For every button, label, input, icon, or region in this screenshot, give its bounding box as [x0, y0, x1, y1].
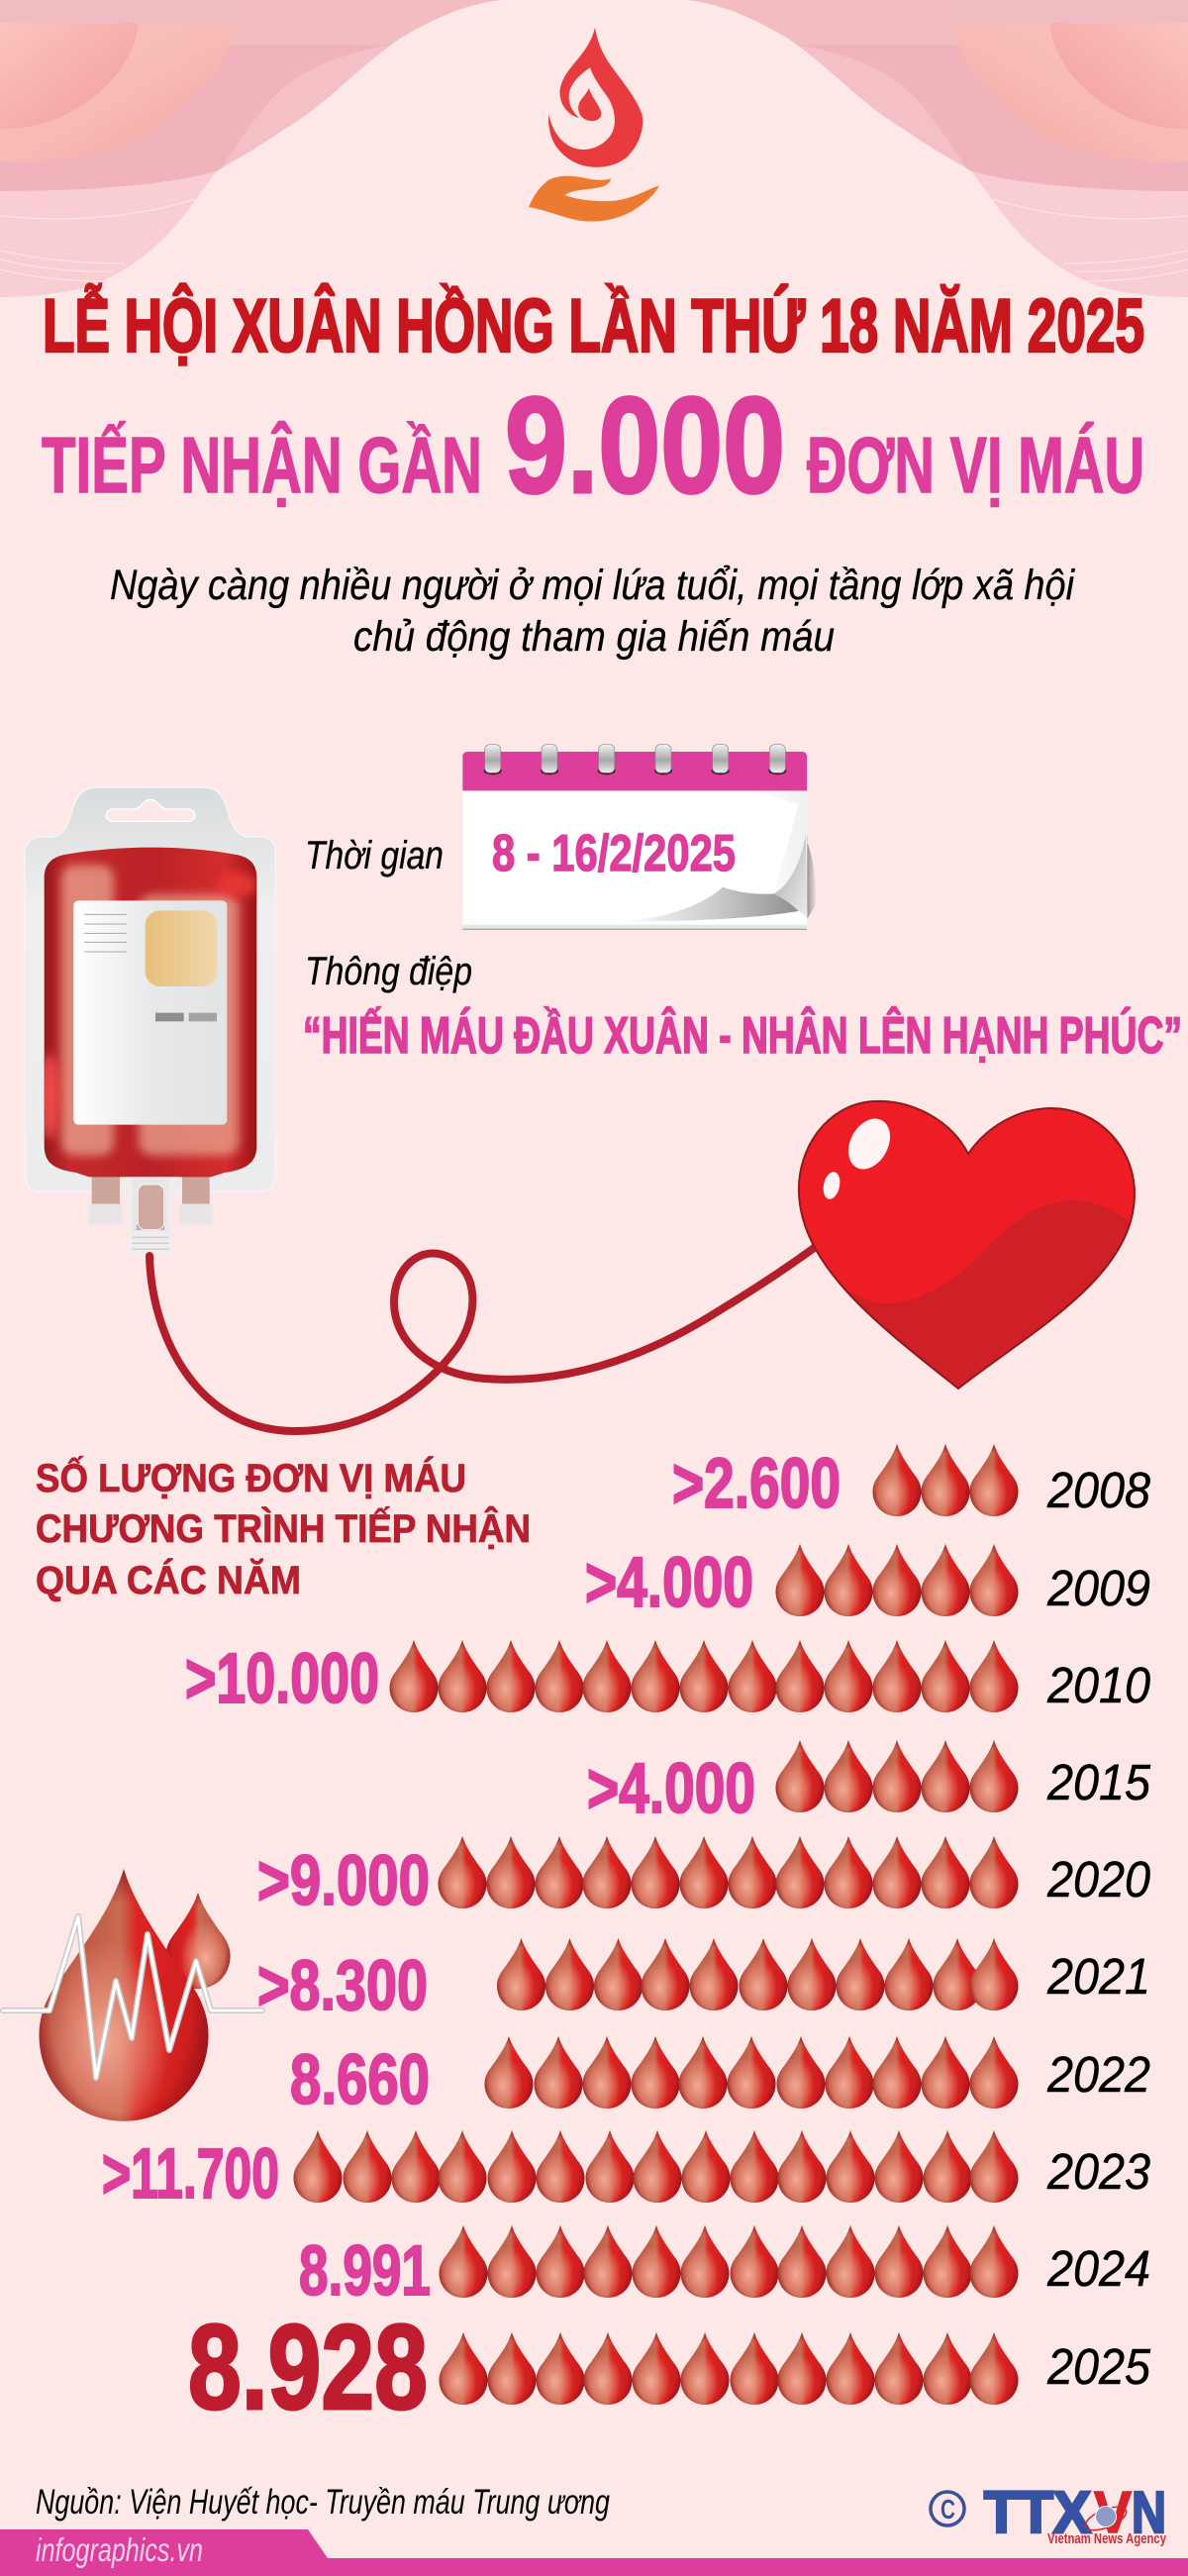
footer bar [0, 2529, 1188, 2576]
row: 2020: >9.000 [257, 1842, 430, 1920]
heading: near 9,000 units [42, 369, 1144, 522]
source note: Nguồn: Viện Huyết học- Truyền máu Trung ương [36, 2483, 610, 2522]
row: 2009: 2009 [1046, 1560, 1150, 1616]
icon: calendar [462, 745, 816, 930]
row: 2020 [257, 1836, 1150, 1920]
row: 2015: 2015 [1046, 1754, 1151, 1810]
icon: heart [792, 1101, 1148, 1406]
row: 2015: >4.000 [587, 1750, 755, 1828]
subtitle text: chủ động tham gia hiến máu [353, 613, 835, 661]
row: 2008 [672, 1444, 1151, 1523]
chart heading: QUA CÁC NĂM [36, 1558, 301, 1602]
subtitle text [110, 562, 1075, 661]
row: 2023 [102, 2130, 1150, 2214]
row: 2022 [290, 2036, 1150, 2119]
row: 2015 [587, 1740, 1151, 1828]
logo: TTXVN: V [1094, 2480, 1132, 2545]
chart heading: SỐ LƯỢNG ĐƠN VỊ MÁU [36, 1455, 466, 1500]
icon: blood drops with heartbeat [3, 1869, 262, 2121]
logo: TTXVN: C [940, 2494, 955, 2524]
row: 2008: 2008 [1046, 1462, 1151, 1518]
row: 2024 [299, 2225, 1150, 2311]
row: 2025 [188, 2300, 1151, 2434]
icon: blood tube [149, 1246, 817, 1431]
row: 2024: 8.991 [299, 2232, 431, 2311]
logo: TTXVN: TTX [984, 2480, 1091, 2545]
icon: blood bag [25, 787, 275, 1255]
curtain: right [673, 0, 1188, 307]
row: 2022: 2022 [1046, 2046, 1150, 2103]
row: 2008: >2.600 [672, 1445, 841, 1523]
row: 2025: 8.928 [188, 2300, 428, 2434]
row: 2022: 8.660 [290, 2041, 430, 2119]
label: message: Thông điệp [305, 950, 472, 993]
row: 2021: >8.300 [257, 1947, 428, 2025]
label: time: Thời gian [305, 834, 444, 877]
row: 2020: 2020 [1046, 1851, 1150, 1907]
row: 2009 [585, 1544, 1150, 1622]
logo: TTXVN [931, 2480, 1166, 2547]
row: 2024: 2024 [1046, 2240, 1150, 2297]
chart heading: CHƯƠNG TRÌNH TIẾP NHẬN [36, 1505, 531, 1551]
row: 2023: >11.700 [102, 2135, 279, 2214]
subtitle text: Ngày càng nhiều người ở mọi lứa tuổi, mọi tầng lớp xã hội [110, 562, 1075, 609]
heading: near 9,000 units: 9.000 [505, 369, 785, 522]
row: 2010 [185, 1640, 1150, 1718]
icon: festival logo flame and hand [529, 28, 658, 222]
row: 2010: >10.000 [185, 1640, 379, 1718]
row: 2021: 2021 [1046, 1948, 1150, 2005]
row: 2009: >4.000 [585, 1544, 753, 1622]
heading: near 9,000 units: TIẾP NHẬN GẦN [42, 421, 482, 509]
curtain: left [0, 0, 515, 307]
logo: TTXVN: N [1132, 2480, 1166, 2545]
chart heading [36, 1455, 531, 1602]
row: 2010: 2010 [1046, 1657, 1150, 1713]
row: 2025: 2025 [1046, 2338, 1151, 2395]
row: 2021 [257, 1938, 1150, 2025]
row: 2023: 2023 [1046, 2143, 1150, 2200]
date text: 8 - 16/2/2025 [492, 825, 736, 882]
footer website text: infographics.vn [36, 2531, 203, 2568]
